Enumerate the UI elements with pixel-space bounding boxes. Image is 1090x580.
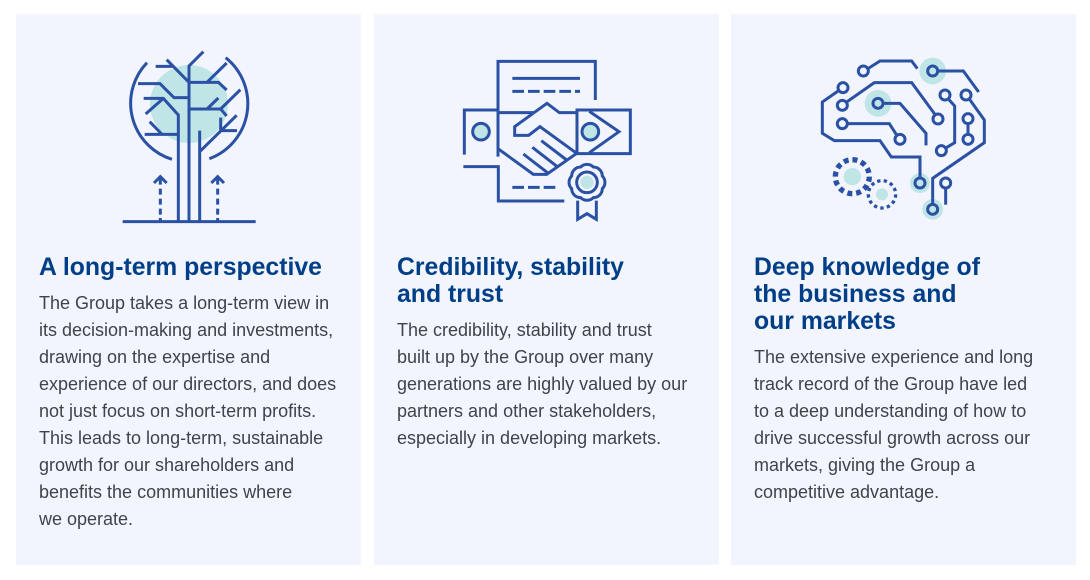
heading: Credibility, stability [397,254,624,281]
body text: This leads to long-term, sustainable [39,428,323,448]
body text [754,347,1033,502]
icon: handshake and certificate [462,60,632,222]
body text: The Group takes a long-term view in [39,293,329,313]
body text: drawing on the expertise and [39,347,270,367]
heading: Deep knowledge of [754,254,980,281]
body text: track record of the Group have led [754,374,1027,394]
body text: competitive advantage. [754,482,939,502]
body text: partners and other stakeholders, [397,401,656,421]
heading: our markets [754,308,896,335]
heading [754,254,980,335]
body text: built up by the Group over many [397,347,653,367]
body text: to a deep understanding of how to [754,401,1026,421]
body text: especially in developing markets. [397,428,661,448]
body text: benefits the communities where [39,482,292,502]
heading [397,254,624,308]
icon: tree with upward arrows [122,50,256,224]
body text: markets, giving the Group a [754,455,975,475]
icon: circuit brain with gears [820,58,986,220]
body text: drive successful growth across our [754,428,1030,448]
body text: its decision-making and investments, [39,320,333,340]
body text: experience of our directors, and does [39,374,336,394]
panel: long-term perspective [16,14,361,565]
panel: deep knowledge [731,14,1076,565]
icon: small gear [868,181,896,208]
heading: A long-term perspective [39,254,322,281]
body text: The credibility, stability and trust [397,320,652,340]
heading: the business and [754,281,957,308]
heading: and trust [397,281,503,308]
body text [397,320,687,448]
panel: credibility, stability and trust [374,14,719,565]
body text: not just focus on short-term profits. [39,401,316,421]
body text: The extensive experience and long [754,347,1033,367]
body text [39,293,336,529]
body text: growth for our shareholders and [39,455,294,475]
icon: large gear [835,160,869,194]
body text: we operate. [39,509,133,529]
body text: generations are highly valued by our [397,374,687,394]
